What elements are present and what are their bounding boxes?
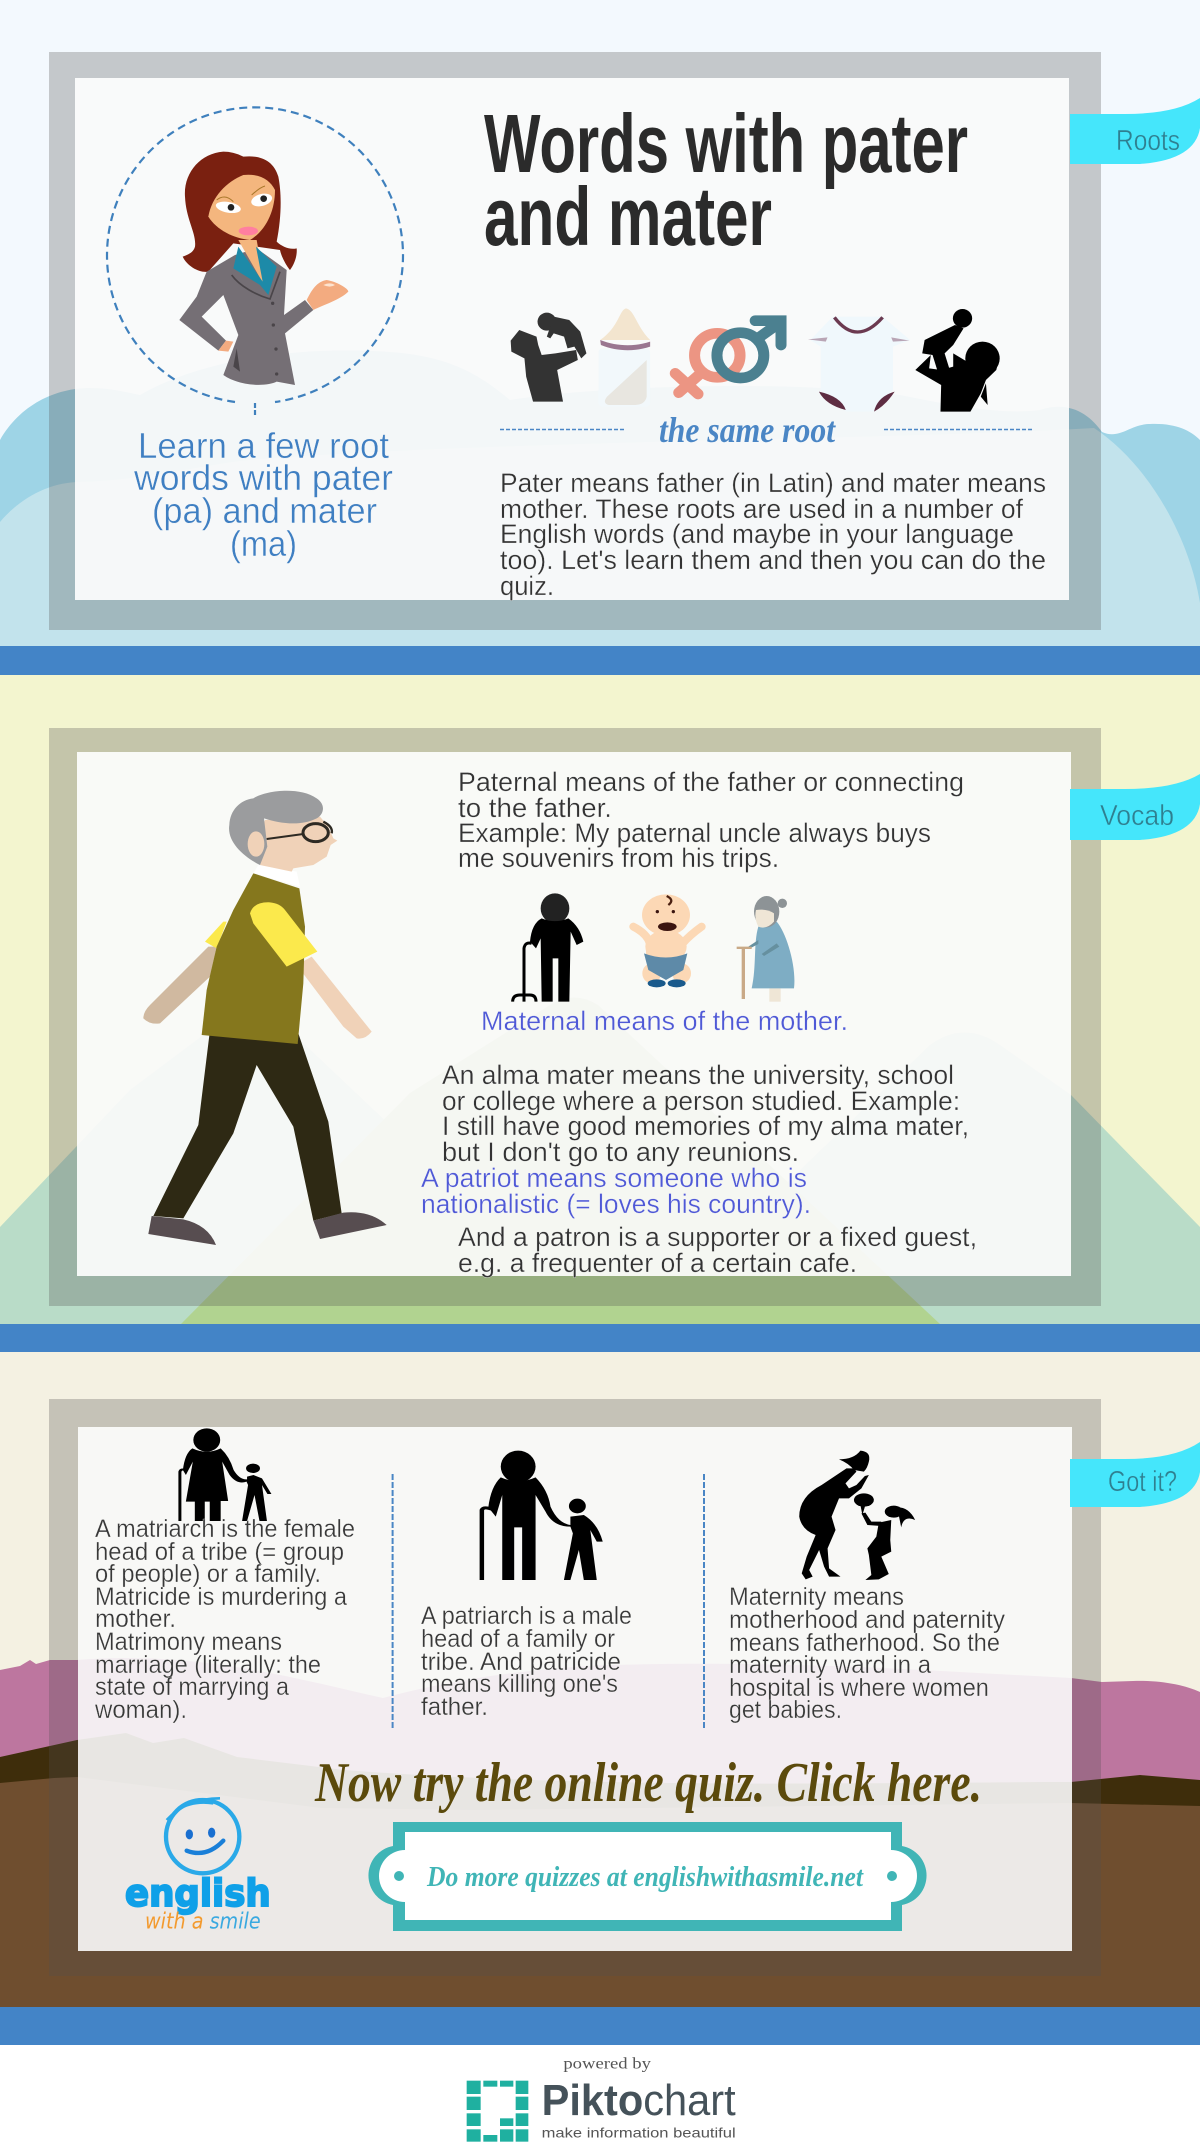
text block: patriarch: father.: [421, 1693, 488, 1721]
text block: patriarch: tribe. And patricide: [421, 1648, 621, 1676]
divider band 3: [0, 2007, 1200, 2045]
text block: paternal: Paternal means of the father or connecting: [458, 767, 964, 797]
icon: gender symbols: [675, 321, 781, 394]
text block: intro: quiz.: [500, 571, 554, 601]
text block: maternity: maternity ward in a: [729, 1651, 931, 1679]
footer background: [0, 2045, 1200, 2154]
tab: Got it?: Got it?: [1108, 1466, 1177, 1498]
text block: alma mater: or college where a person studied. Example:: [442, 1086, 960, 1116]
text block: patron: [458, 1222, 977, 1278]
footer: Piktochart branding: make information beautiful: [542, 2124, 736, 2140]
text block: patriarch: means killing one's: [421, 1670, 618, 1698]
divider band 1: [0, 646, 1200, 675]
tab: Roots: Roots: [1116, 125, 1180, 157]
logo: english with a smile: with a smile: [145, 1909, 261, 1934]
intro caption: (pa) and mater: [152, 490, 377, 531]
intro caption: words with pater: [133, 457, 393, 498]
text block: matriarch: A matriarch is the female: [95, 1515, 355, 1543]
definition: patriot: [421, 1163, 811, 1219]
text block: intro: mother. These roots are used in a number of: [500, 494, 1023, 524]
icon: old woman with cane: [737, 896, 794, 1002]
text block: matriarch: of people) or a family.: [95, 1560, 321, 1588]
button: more quizzes: Do more quizzes at englishwithasmile.net: [426, 1861, 864, 1893]
icon: baby onesie: [808, 317, 910, 412]
icon: mother and baby: [915, 309, 1000, 412]
definition: patriot: A patriot means someone who is: [421, 1163, 807, 1193]
man legs: [148, 1030, 387, 1245]
text block: matriarch: Matricide is murdering a: [95, 1583, 347, 1611]
footer: Piktochart branding: [467, 2055, 736, 2142]
icon: mother giving flowers: [799, 1451, 915, 1580]
text block: maternity: Maternity means: [729, 1583, 904, 1611]
button: more quizzes: [368, 1822, 927, 1931]
text block: alma mater: [442, 1060, 969, 1167]
text block: maternity: hospital is where women: [729, 1674, 989, 1702]
text block: alma mater: I still have good memories of my alma mater,: [442, 1111, 969, 1141]
text block: paternal: Example: My paternal uncle always buys: [458, 818, 931, 848]
logo: english with a smile: [125, 1798, 271, 1934]
text block: intro: [500, 468, 1046, 601]
icon row: people: [513, 893, 794, 1002]
title: and mater: [484, 170, 772, 263]
text block: patriarch: head of a family or: [421, 1625, 615, 1653]
text block: matriarch: state of marrying a: [95, 1673, 289, 1701]
icon: crying baby: [633, 894, 702, 987]
text block: intro: Pater means father (in Latin) and mater means: [500, 468, 1046, 498]
footer: Piktochart branding: Piktochart: [542, 2077, 736, 2125]
logo mark: [467, 2081, 528, 2142]
text block: maternity: [729, 1583, 1005, 1724]
tab: Roots: [1070, 98, 1200, 164]
illustration: walking man: [143, 791, 387, 1245]
section background: hills: [0, 1352, 1200, 2007]
definition: maternal: Maternal means of the mother.: [481, 1006, 848, 1036]
man torso and head: [143, 791, 372, 1044]
subheading: the same root: the same root: [659, 410, 836, 450]
text block: matriarch: Matrimony means: [95, 1628, 282, 1656]
logo: english with a smile: english: [125, 1871, 271, 1915]
text block: patron: e.g. a frequenter of a certain cafe.: [458, 1248, 857, 1278]
panel: vocab: [77, 752, 1071, 1276]
section background: mountains: [0, 675, 1200, 1324]
frame: roots: [49, 52, 1101, 630]
text block: patron: And a patron is a supporter or a fixed guest,: [458, 1222, 977, 1252]
frame: got it: [49, 1399, 1101, 1976]
text block: patriarch: A patriarch is a male: [421, 1602, 632, 1630]
text block: matriarch: [94, 1515, 355, 1724]
icon row: family symbols: [511, 308, 1000, 412]
intro caption: Learn a few root: [138, 425, 389, 466]
dashed circle: [107, 107, 403, 417]
text block: alma mater: An alma mater means the university, school: [442, 1060, 954, 1090]
tab: Vocab: [1070, 774, 1200, 840]
tab: Got it?: [1070, 1442, 1200, 1507]
intro caption: (ma): [230, 523, 297, 564]
tab: Vocab: Vocab: [1100, 800, 1174, 832]
text block: paternal: [458, 767, 964, 873]
section background: sky with clouds: [0, 0, 1200, 646]
title: [484, 97, 968, 263]
text block: maternity: means fatherhood. So the: [729, 1629, 1000, 1657]
column dividers: [393, 1474, 704, 1728]
panel: roots: [75, 78, 1069, 600]
text block: matriarch: head of a tribe (= group: [95, 1538, 344, 1566]
text block: patriarch: [421, 1602, 632, 1721]
icon: old man: [513, 893, 583, 1002]
icon: baby bottle: [598, 308, 650, 407]
panel: got it: [78, 1427, 1072, 1951]
icon: father and baby: [511, 313, 586, 402]
divider band 2: [0, 1324, 1200, 1352]
icon: businesswoman: [179, 152, 348, 385]
text block: paternal: to the father.: [458, 793, 612, 823]
frame: vocab: [49, 728, 1101, 1306]
text block: intro: too). Let's learn them and then you can do the: [500, 545, 1046, 575]
text block: maternity: get babies.: [729, 1696, 842, 1724]
text block: matriarch: marriage (literally: the: [95, 1651, 321, 1679]
text block: paternal: me souvenirs from his trips.: [458, 843, 779, 873]
title: Words with pater: [484, 97, 968, 190]
text block: matriarch: woman).: [94, 1696, 187, 1724]
text block: alma mater: but I don't go to any reunions.: [442, 1137, 799, 1167]
icon: grandfather with child: [482, 1451, 603, 1580]
call to action: quiz heading: Now try the online quiz. Click here.: [314, 1752, 982, 1814]
text block: intro: English words (and maybe in your language: [500, 519, 1014, 549]
footer: Piktochart branding: powered by: [563, 2055, 651, 2072]
text block: matriarch: mother.: [95, 1605, 176, 1633]
intro caption: [133, 425, 393, 564]
text block: maternity: motherhood and paternity: [729, 1606, 1005, 1634]
definition: patriot: nationalistic (= loves his country).: [421, 1189, 811, 1219]
icon: grandmother with child: [180, 1428, 271, 1521]
